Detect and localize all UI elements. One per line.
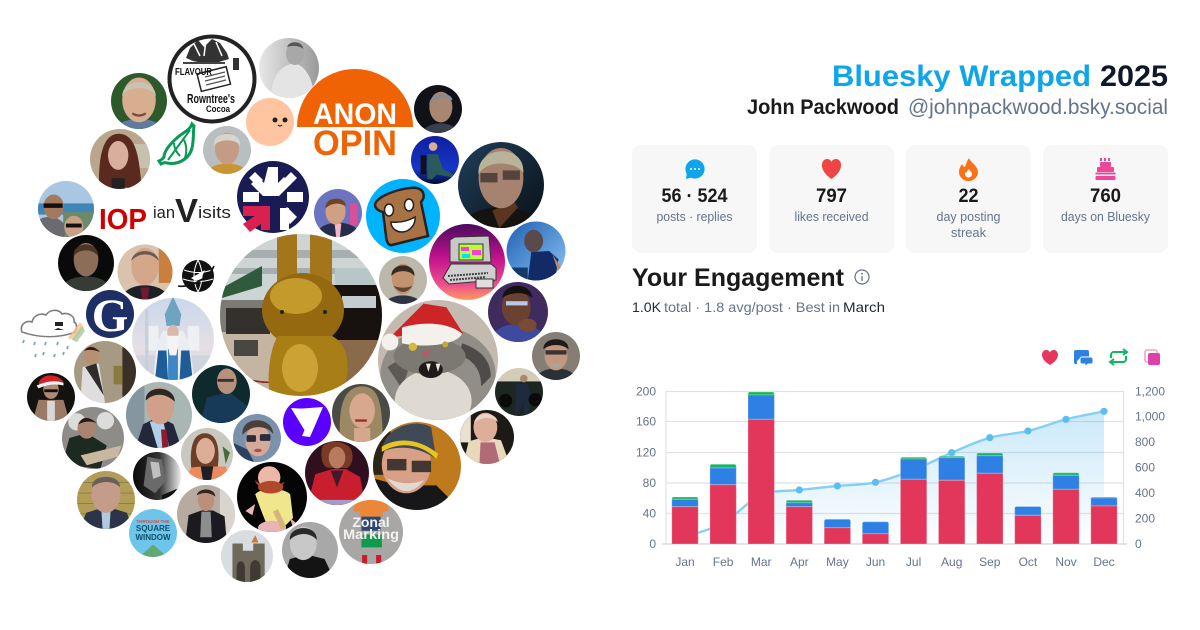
- right axis labels: 200: [1135, 512, 1155, 526]
- avatar: woman with red hair: [90, 129, 150, 189]
- engagement summary: 1.0K: [632, 299, 662, 315]
- avatar: rowntree's cocoa advert: FLAVOUR: [175, 67, 213, 78]
- panel: day posting streak: day posting: [936, 210, 1001, 224]
- avatar: rowntree's cocoa advert: [170, 36, 254, 122]
- title: 2025: [1100, 60, 1168, 93]
- user name and handle: John Packwood: [747, 96, 899, 119]
- user name and handle: @johnpackwood.bsky.social: [908, 96, 1168, 119]
- cumulative area and line: [685, 408, 1108, 544]
- left axis labels: 200: [636, 384, 656, 398]
- avatar: anon opin logo: ANON: [313, 98, 397, 131]
- avatar: bald man green background: [111, 73, 167, 129]
- avatar: man on motorbike: [495, 368, 543, 416]
- avatar: beard man grey background: [379, 256, 427, 304]
- avatar: zonal marking: [339, 500, 403, 564]
- avatar: verasight purple logo: [283, 398, 331, 446]
- avatar: golden rabbit statue: [220, 234, 382, 398]
- avatar: zonal marking: Marking: [343, 526, 399, 542]
- avatar: dark man black shirt: [58, 235, 114, 291]
- panel: day posting streak: 22: [958, 186, 978, 207]
- left axis labels: [636, 384, 656, 551]
- avatar: man suit glasses: [118, 244, 172, 300]
- bar: oct: [1015, 506, 1041, 544]
- month labels: Nov: [1055, 555, 1077, 569]
- avatar: person blue t-shirt: [506, 222, 566, 280]
- left axis labels: 160: [636, 414, 656, 428]
- panel: day posting streak: [906, 145, 1031, 253]
- avatar: through the square window: THROUGH THE: [136, 519, 170, 524]
- avatar: anon opin logo: OPIN: [313, 124, 397, 163]
- right axis labels: 1,200: [1135, 384, 1165, 398]
- avatar: cat in santa hat: [378, 300, 498, 432]
- avatar: man on dark background: [414, 85, 462, 133]
- left axis labels: 120: [636, 446, 656, 460]
- avatar: man with brick wall: [77, 471, 135, 529]
- avatar: woman red jacket at podium: [305, 441, 369, 505]
- avatar: rain cloud with rainbow: [21, 310, 85, 357]
- right axis labels: [1135, 384, 1165, 551]
- month labels: Jul: [906, 555, 921, 569]
- avatar: woman brown hair salmon jacket: [181, 428, 233, 480]
- month labels: Aug: [941, 555, 962, 569]
- avatar: peach smiley face: [246, 98, 294, 146]
- panel: likes received: [769, 145, 894, 253]
- avatar cluster: [21, 36, 580, 582]
- right axis labels: 400: [1135, 486, 1155, 500]
- avatar: grayscale man white shirt: [259, 38, 319, 98]
- avatar: woman long hair: [332, 384, 390, 442]
- icon: legend replies: [1074, 350, 1093, 367]
- stacked bars: [672, 392, 1117, 544]
- month labels: Sep: [979, 555, 1001, 569]
- avatar: bald man blue jacket: [192, 365, 250, 423]
- icon: legend heart: [1042, 350, 1058, 365]
- avatar: zonal marking: Zonal: [352, 514, 390, 530]
- avatar: retro computer: [429, 224, 505, 300]
- ianvisits logo: [153, 192, 231, 229]
- left axis labels: 40: [643, 506, 656, 520]
- avatar: black and white man: [282, 522, 338, 578]
- month labels: Dec: [1093, 555, 1115, 569]
- avatar: black and white profile: [133, 452, 181, 500]
- month labels: Feb: [713, 555, 734, 569]
- avatar: through the square window: WINDOW: [135, 533, 171, 542]
- avatar: old man with glasses: [458, 142, 544, 228]
- chart grid: [662, 391, 1127, 544]
- bar: sep: [977, 453, 1003, 544]
- engagement summary: total · 1.8 avg/post · Best in: [664, 299, 840, 315]
- avatar: man green jacket: [62, 407, 124, 469]
- globe bird logo: [178, 260, 214, 292]
- bar: may: [824, 519, 851, 544]
- right axis labels: 1,000: [1135, 410, 1165, 424]
- icon: birthday cake: [1096, 158, 1116, 180]
- month labels: Apr: [790, 555, 809, 569]
- iop logo: IOP: [99, 204, 147, 236]
- bar: dec: [1091, 497, 1117, 544]
- month labels: Mar: [751, 555, 772, 569]
- avatar: anon opin logo: [297, 69, 413, 163]
- engagement summary: [632, 299, 885, 315]
- avatar: cathedral towers: [221, 530, 273, 582]
- bar: apr: [786, 500, 812, 544]
- panel: days on bluesky: [1043, 145, 1168, 253]
- icon: heart: [822, 159, 841, 179]
- bar: jul: [900, 457, 927, 544]
- avatar: smiling man in suit: [126, 382, 192, 448]
- panel: likes received: likes received: [794, 210, 869, 224]
- panel: posts and replies: [632, 145, 757, 253]
- bar: mar: [748, 392, 774, 544]
- avatar: man in knitted hat: [373, 422, 461, 510]
- title: Bluesky Wrapped: [832, 60, 1091, 93]
- ianvisits logo: V: [175, 192, 198, 229]
- panel: days on bluesky: 760: [1090, 186, 1121, 207]
- user name and handle: [747, 96, 1168, 119]
- left axis labels: 0: [649, 537, 656, 551]
- bar: jan: [672, 497, 698, 544]
- avatar: wizard in blue robe: [132, 296, 214, 380]
- ianvisits logo: ian: [153, 203, 175, 222]
- avatar: through the square window: SQUARE: [136, 524, 171, 533]
- ianvisits logo: isits: [198, 203, 231, 222]
- panel: likes received: 797: [816, 186, 847, 207]
- month labels: Jan: [675, 555, 695, 569]
- month labels: Jun: [866, 555, 885, 569]
- icon: info: [855, 270, 869, 284]
- engagement summary: March: [843, 299, 885, 315]
- panel: days on bluesky: days on Bluesky: [1061, 210, 1151, 224]
- bar: nov: [1053, 473, 1079, 544]
- avatar: man black jacket waistcoat: [177, 485, 235, 543]
- legend icons: [1042, 349, 1160, 367]
- panel: day posting streak: streak: [951, 226, 987, 240]
- chart: monthly engagement: [636, 384, 1165, 569]
- avatar: man pink tie: [314, 189, 362, 237]
- avatar: figure in santa hat: [27, 373, 75, 421]
- avatar: man with glasses grey background: [532, 332, 580, 380]
- month labels: May: [826, 555, 849, 569]
- avatar: toast character: [366, 179, 440, 253]
- icon: chat bubble: [685, 159, 705, 179]
- avatar: union arrows logo: [237, 161, 309, 233]
- bar: aug: [938, 456, 965, 544]
- onion logo: [159, 124, 194, 164]
- icon: flame: [959, 158, 978, 181]
- avatar: grey haired man mustard top: [203, 126, 251, 174]
- bar: jun: [862, 522, 889, 544]
- icon: legend reposts: [1110, 349, 1127, 365]
- panel: posts and replies: posts · replies: [656, 210, 732, 224]
- avatar: woman short hair sunglasses: [233, 414, 281, 462]
- avatar: through the square window: [129, 509, 177, 557]
- panel: posts and replies: 56 · 524: [662, 186, 728, 207]
- icon: legend quotes: [1145, 350, 1160, 365]
- avatar: rowntree's cocoa advert: Rowntree's: [187, 91, 235, 106]
- right axis labels: 600: [1135, 460, 1155, 474]
- right axis labels: 800: [1135, 435, 1155, 449]
- avatar: person seated on blue stage: [411, 136, 459, 184]
- avatar: cartoon bearded man in nightshirt: [237, 462, 307, 535]
- avatar: man checked shirt: [460, 410, 514, 464]
- month labels: Oct: [1019, 555, 1038, 569]
- heading: your engagement: Your Engagement: [632, 264, 845, 292]
- avatar: man with glasses purple background: [488, 282, 548, 342]
- avatar: rowntree's cocoa advert: Cocoa: [206, 104, 231, 114]
- avatar: couple with sunglasses: [38, 181, 94, 237]
- bar: feb: [710, 464, 736, 544]
- avatar: man in waistcoat: [74, 341, 136, 403]
- right axis labels: 0: [1135, 537, 1142, 551]
- avatar: guardian g logo: G: [92, 290, 128, 342]
- month labels: [675, 555, 1115, 569]
- left axis labels: 80: [643, 476, 656, 490]
